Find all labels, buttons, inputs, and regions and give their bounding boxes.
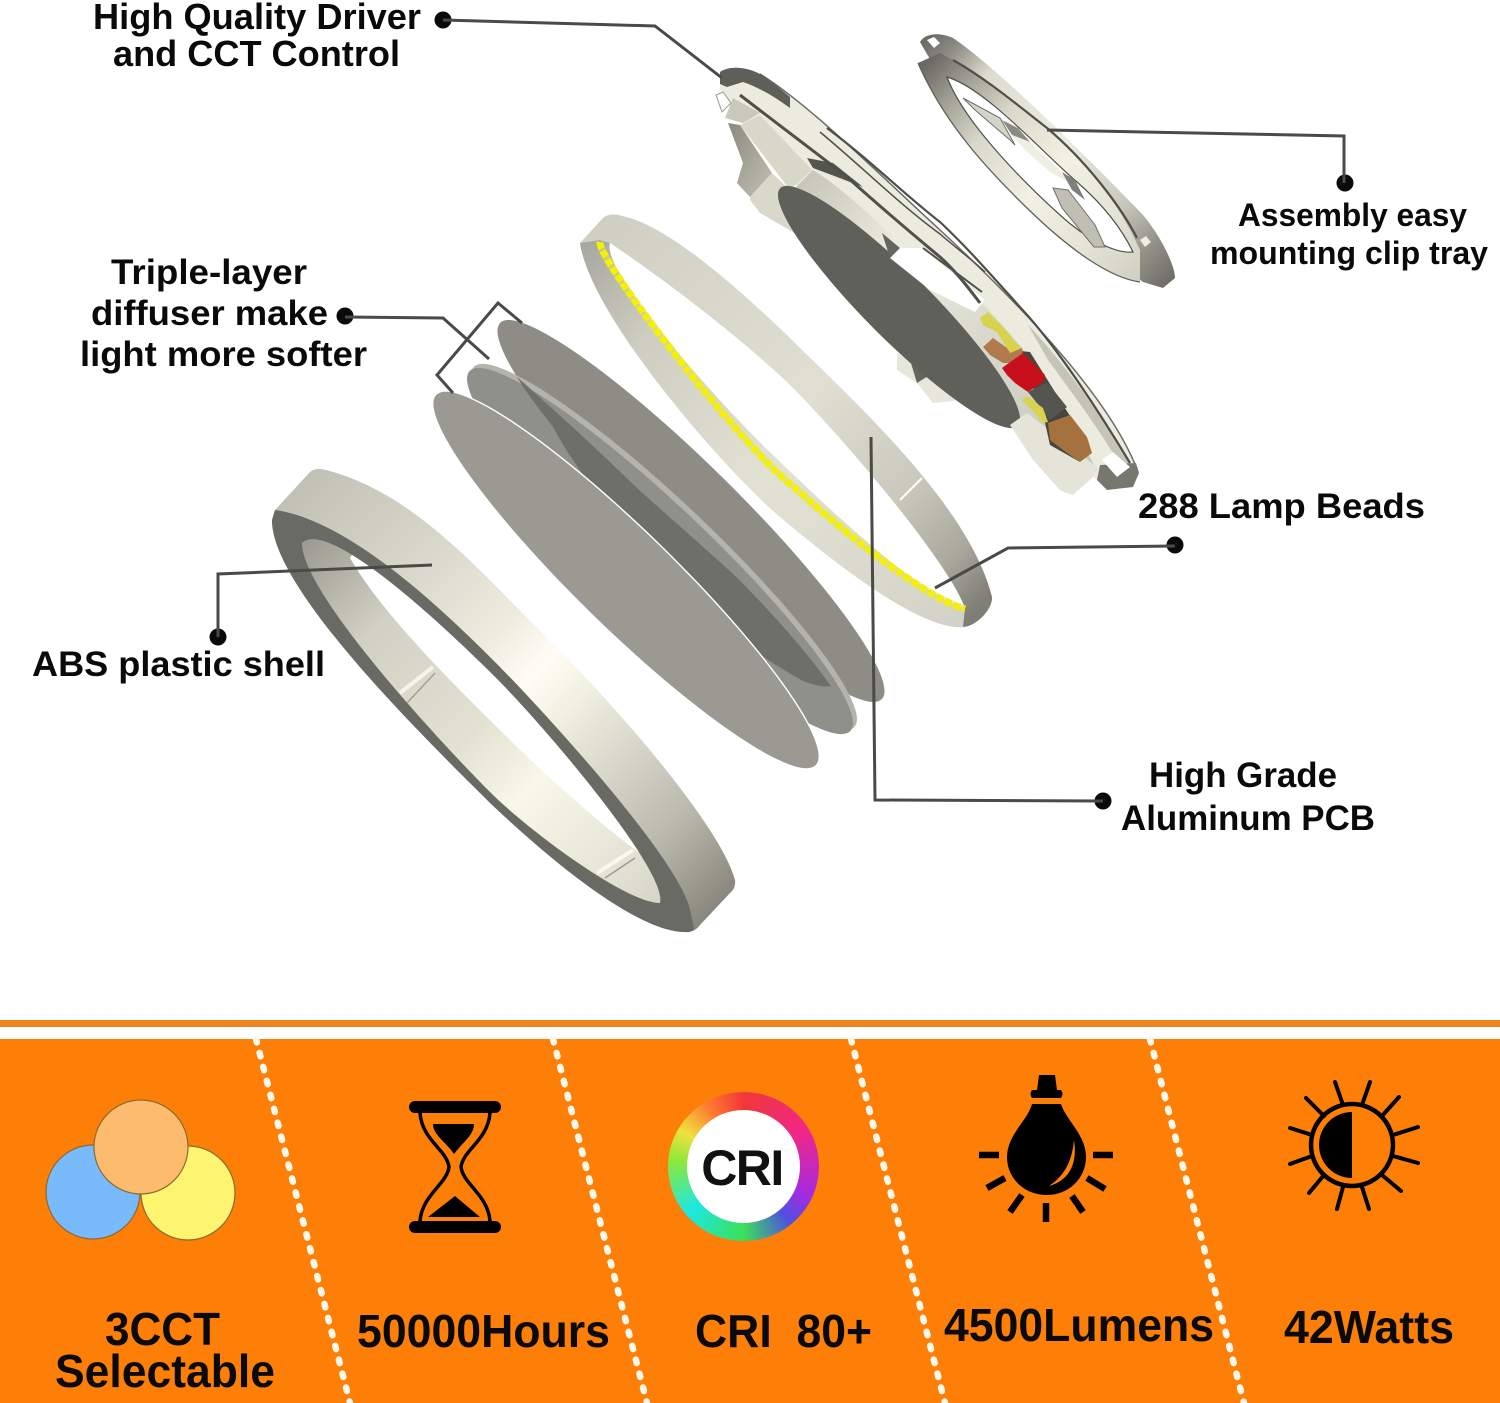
label: diffuser: diffuser make — [91, 294, 328, 333]
icon: half sun — [1290, 1082, 1418, 1209]
label: driver: and CCT Control — [113, 33, 400, 74]
label: diffuser: Triple-layer — [111, 253, 307, 292]
label: shell: ABS plastic shell — [32, 645, 325, 684]
icon: CRI rainbow badge: CRI — [701, 1140, 783, 1196]
tray spokes — [963, 98, 1105, 247]
label: clip tray: Assembly easy — [1238, 197, 1467, 233]
icon: lightbulb with rays — [979, 1075, 1113, 1222]
feature label: watts: 42Watts — [1284, 1301, 1454, 1353]
label: clip tray — [1210, 197, 1488, 271]
exploded view: mounting clip tray — [918, 34, 1175, 288]
icon: CRI rainbow badge — [668, 1092, 819, 1241]
label: driver — [93, 0, 421, 74]
leader: shell — [210, 565, 432, 646]
orange top stripe — [0, 1020, 1500, 1027]
exploded view: aluminum PCB ring with LED beads — [580, 214, 992, 627]
icon: hourglass — [409, 1101, 501, 1233]
label: diffuser — [80, 253, 367, 374]
driver components — [980, 312, 1092, 462]
label: diffuser: light more softer — [80, 335, 367, 374]
exploded view: triple-layer diffuser discs — [403, 290, 914, 799]
leader: PCB — [871, 437, 1112, 810]
feature label: 3CCT — [55, 1303, 275, 1397]
feature label: 3CCT: Selectable — [55, 1345, 275, 1397]
feature label: hours: 50000Hours — [357, 1305, 610, 1357]
label: PCB: High Grade — [1149, 756, 1337, 795]
exploded view: driver housing — [716, 68, 1139, 495]
leader: driver — [434, 12, 722, 78]
label: PCB: Aluminum PCB — [1121, 799, 1375, 838]
leader: lamp beads — [935, 536, 1184, 588]
feature label: CRI: CRI 80+ — [695, 1305, 872, 1357]
leader: diffuser bracket — [336, 303, 522, 393]
label: PCB — [1121, 756, 1375, 838]
icon: three colour circles — [46, 1100, 235, 1240]
label: lamp beads: 288 Lamp Beads — [1138, 487, 1425, 526]
feature label: lumens: 4500Lumens — [944, 1299, 1214, 1351]
leader: clip tray — [1047, 130, 1354, 192]
feature label: 3CCT: 3CCT — [105, 1303, 220, 1355]
label: clip tray: mounting clip tray — [1210, 235, 1488, 271]
exploded view: ABS plastic shell ring — [272, 469, 735, 932]
orange feature band — [0, 1039, 1500, 1403]
